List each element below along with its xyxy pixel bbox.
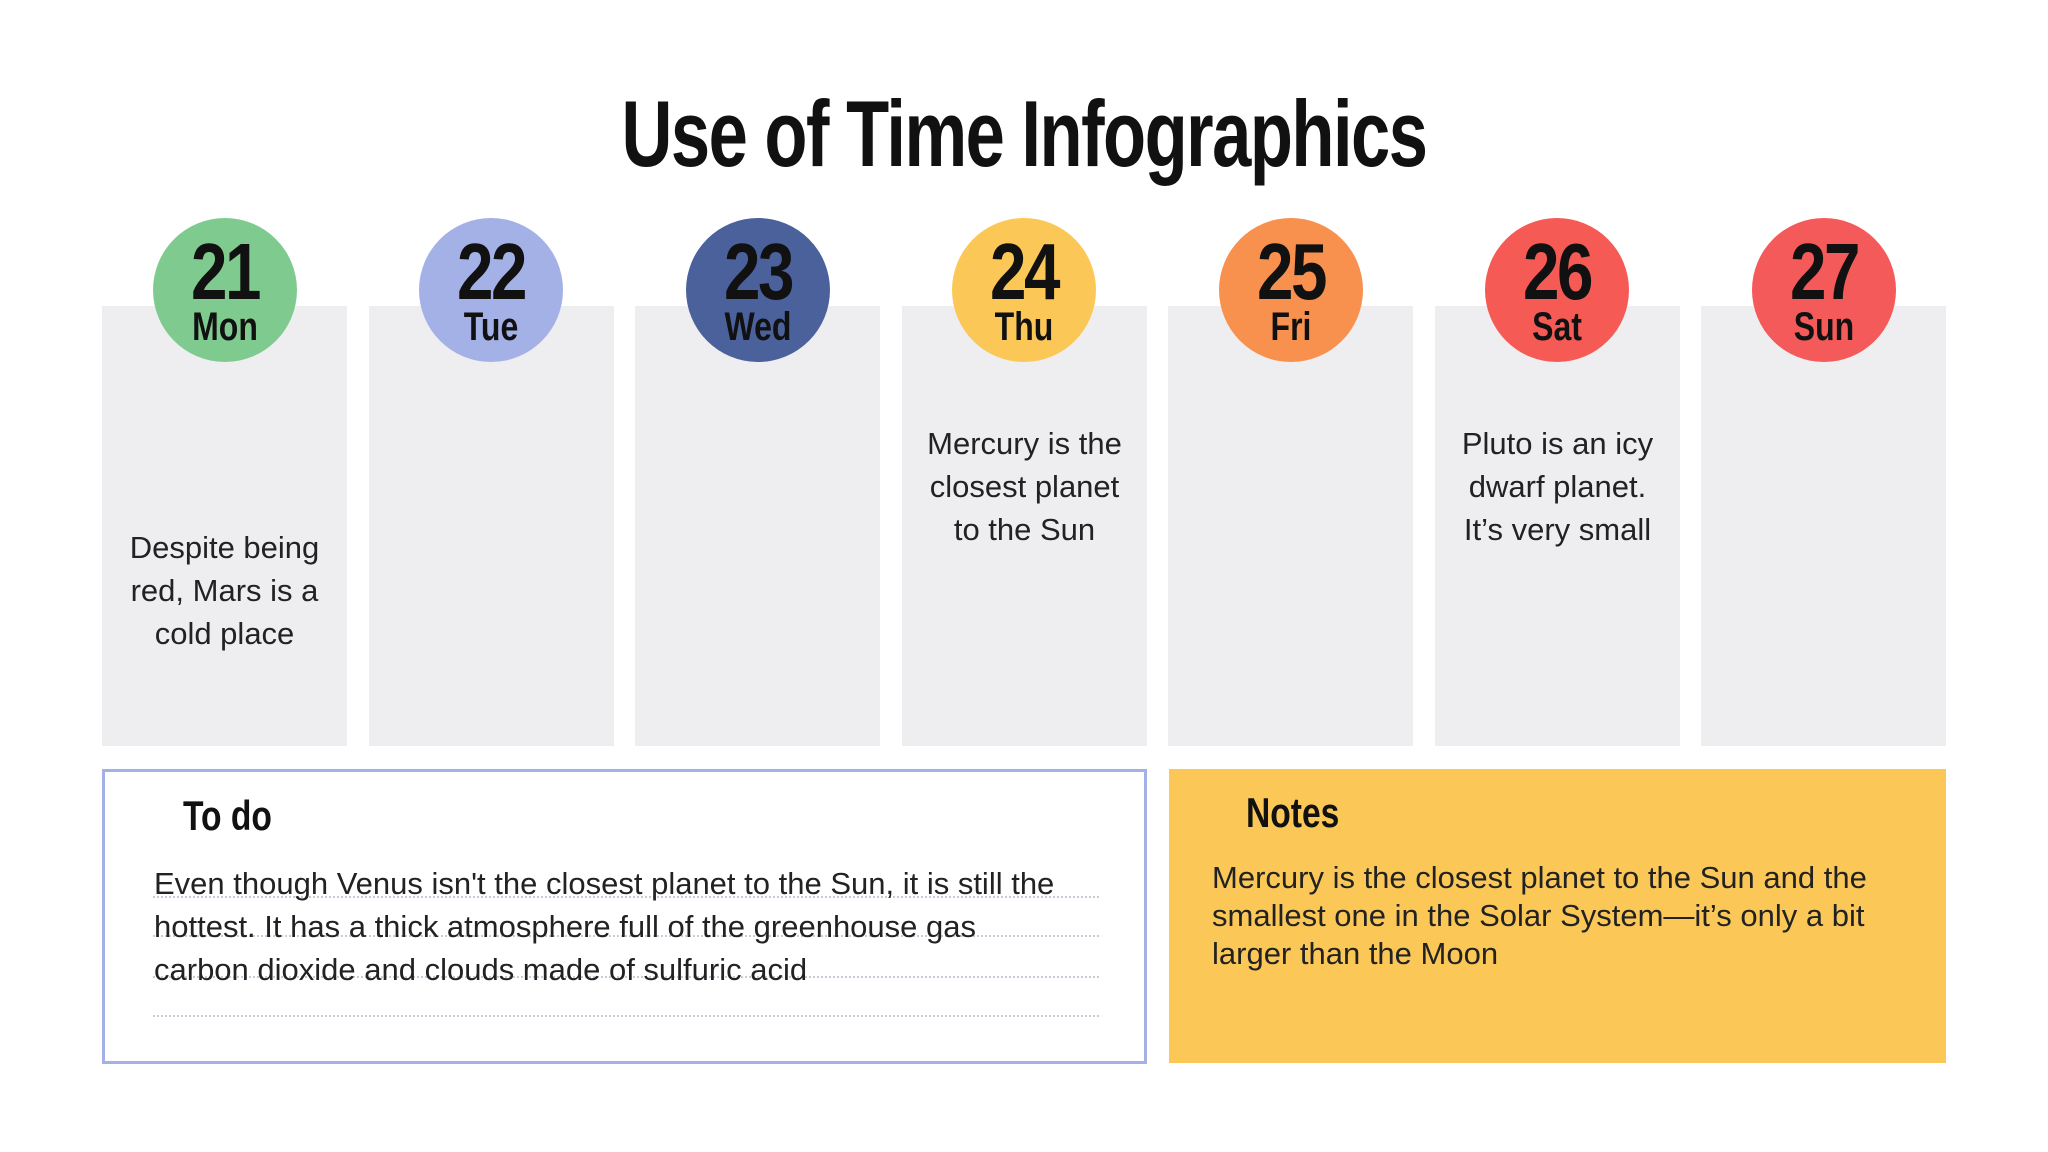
circle: 23 Wed: 23 [724, 227, 792, 316]
panel: to do [102, 769, 1147, 1064]
circle: 21 Mon: Mon [192, 305, 258, 349]
circle: 26 Sat: 26 [1523, 227, 1591, 316]
text: to do body: carbon dioxide and clouds made of sulfuric acid [154, 952, 807, 987]
column: 21 Mon [102, 306, 347, 746]
title: Use of Time Infographics [622, 81, 1426, 186]
text: Mon: red, Mars is a [131, 573, 318, 608]
circle: 24 Thu [952, 218, 1096, 362]
text: notes body: smallest one in the Solar System—it’s only a bit [1212, 898, 1864, 933]
text: Thu: to the Sun [954, 512, 1095, 547]
circle: 24 Thu: 24 [990, 227, 1058, 316]
column: 25 Fri [1168, 306, 1413, 746]
column: 27 Sun [1701, 306, 1946, 746]
circle: 25 Fri: Fri [1271, 305, 1311, 349]
column: 24 Thu [902, 306, 1147, 746]
text: to do body: hottest. It has a thick atmosphere full of the greenhouse gas [154, 909, 976, 944]
circle: 26 Sat: Sat [1532, 305, 1582, 349]
circle: 23 Wed [686, 218, 830, 362]
circle: 22 Tue: Tue [464, 305, 518, 349]
text: Thu: Mercury is the [927, 426, 1122, 461]
circle: 25 Fri: 25 [1257, 227, 1325, 316]
circle: 27 Sun [1752, 218, 1896, 362]
circle: 22 Tue [419, 218, 563, 362]
circle: 24 Thu: Thu [995, 305, 1053, 349]
text: Sat: dwarf planet. [1469, 469, 1646, 504]
text: to do body: Even though Venus isn't the closest planet to the Sun, it is still the [154, 866, 1054, 901]
text: Mon: Despite being [130, 530, 319, 565]
circle: 25 Fri [1219, 218, 1363, 362]
text: Mon [130, 530, 319, 651]
circle: 27 Sun: 27 [1790, 227, 1858, 316]
circle: 23 Wed: Wed [725, 305, 791, 349]
text: Thu [927, 426, 1122, 547]
text: Thu: closest planet [930, 469, 1119, 504]
text: Sat [1462, 426, 1653, 547]
circle: 21 Mon [153, 218, 297, 362]
text: Mon: cold place [155, 616, 294, 651]
circle: 21 Mon: 21 [191, 227, 259, 316]
text: notes body: larger than the Moon [1212, 936, 1498, 971]
column: 23 Wed [635, 306, 880, 746]
column: 26 Sat [1435, 306, 1680, 746]
circle: 27 Sun: Sun [1794, 305, 1854, 349]
text: to do body [154, 866, 1054, 987]
panel: notes [1169, 769, 1946, 1063]
heading: to do: To do [183, 792, 272, 839]
column: 22 Tue [369, 306, 614, 746]
text: Sat: Pluto is an icy [1462, 426, 1653, 461]
text: notes body [1212, 860, 1867, 971]
circle: 26 Sat [1485, 218, 1629, 362]
circle: 22 Tue: 22 [457, 227, 525, 316]
heading: notes: Notes [1246, 789, 1339, 836]
text: Sat: It’s very small [1464, 512, 1651, 547]
text: notes body: Mercury is the closest planet to the Sun and the [1212, 860, 1867, 895]
